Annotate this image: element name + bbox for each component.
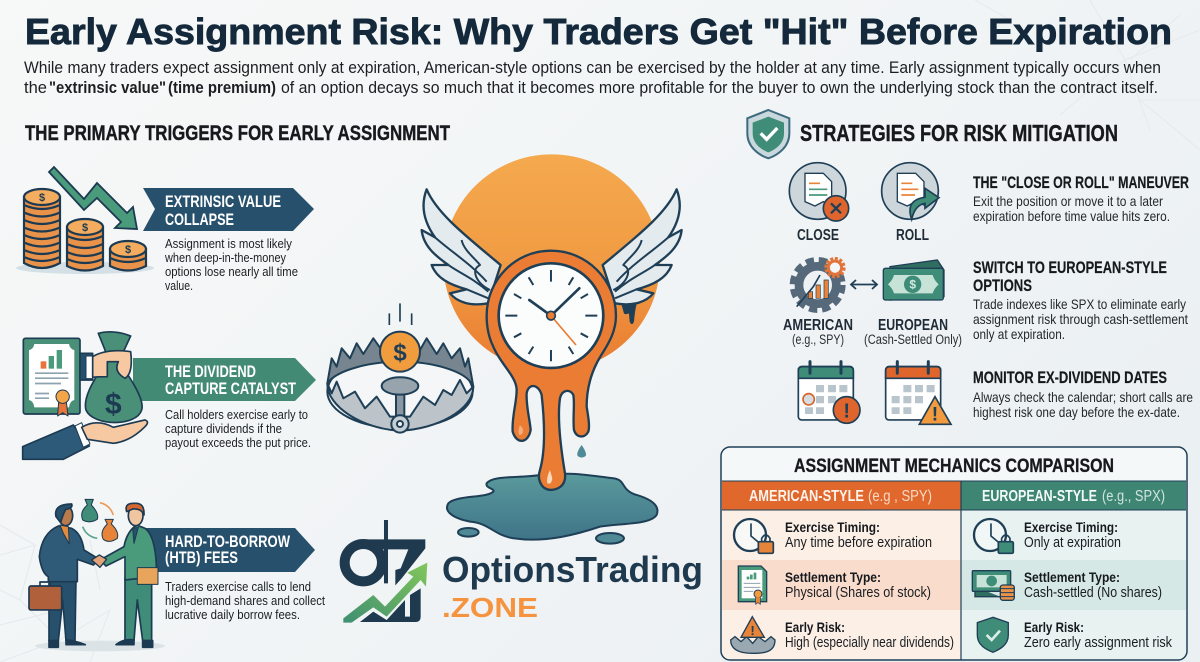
labels: american: AMERICAN: [783, 317, 853, 334]
icon: close: [789, 163, 849, 221]
ribbon: dividend capture: [133, 358, 316, 401]
icon: calendar with warning: !: [932, 405, 938, 426]
text: switch to european: only at expiration.: [973, 326, 1065, 342]
icon: calendar with warning: [886, 362, 951, 426]
header: american-style: (e.g , SPY): [868, 488, 932, 505]
right wing: [603, 189, 682, 304]
text: dividend description: payout exceeds the put price.: [165, 435, 311, 450]
ribbon: hard to borrow: [145, 528, 315, 572]
panel: hard-to-borrow fees: [29, 499, 325, 651]
intro text: While many traders expect assignment only at expiration, American-style options can be exercised by the holder at any time. Early assignment typically occurs when: [24, 59, 1161, 77]
puddle: [447, 445, 657, 544]
logo .zone: .ZONE: [442, 592, 538, 623]
logo: OptionsTrading.Zone: [343, 520, 703, 623]
illustration: bear trap with dollar coin: $: [393, 339, 407, 366]
ribbon: hard to borrow: HARD-TO-BORROW: [165, 533, 290, 551]
text: extrinsic description: when deep-in-the-money: [164, 250, 286, 265]
text: switch to european: [973, 259, 1188, 342]
text: monitor ex-dividend dates: [973, 369, 1193, 420]
illustration: melting winged clock: [422, 154, 682, 544]
icon: european bills: $: [909, 278, 916, 292]
text: close or roll: Exit the position or move it to a later: [973, 193, 1163, 209]
icon: stock certificate: [738, 566, 767, 604]
icon: calendar with alert: [798, 362, 860, 423]
ribbon: hard to borrow: (HTB) FEES: [165, 549, 238, 567]
label: close: CLOSE: [797, 227, 839, 244]
icon: roll: [882, 163, 939, 219]
text: extrinsic description: options lose nearly all time: [165, 264, 298, 279]
logo wordmark: OptionsTrading: [442, 549, 703, 590]
text: close or roll: [973, 174, 1189, 224]
text: american timing: [785, 519, 932, 551]
panel: extrinsic value collapse: [16, 167, 314, 293]
icon: coin stacks with falling arrow: $: [39, 192, 45, 204]
ribbon: extrinsic value collapse: EXTRINSIC VALUE: [165, 193, 281, 211]
icon: european bills: [883, 260, 944, 300]
heading: primary triggers: THE PRIMARY TRIGGERS FOR EARLY ASSIGNMENT: [25, 121, 450, 145]
label: roll: ROLL: [896, 227, 929, 244]
melting clock body: [487, 251, 616, 490]
illustration: bear trap with dollar coin: [327, 303, 473, 433]
text: HTB description: [165, 579, 325, 622]
icon: certificate and money bag handoff: $: [105, 388, 122, 421]
intro text: the: [24, 79, 47, 97]
text: dividend description: Call holders exercise early to: [165, 407, 308, 422]
labels: european: [864, 317, 962, 347]
panel: strategies for risk mitigation: [747, 110, 1193, 426]
text: european risk: [1024, 619, 1173, 651]
left wing: [422, 189, 501, 304]
labels: european: (Cash-Settled Only): [864, 332, 962, 347]
header: american-style: AMERICAN-STYLE: [749, 488, 864, 505]
icon: coin stacks with falling arrow: $: [125, 244, 131, 256]
text: european timing: Only at expiration: [1024, 535, 1121, 551]
icon: coin stacks with falling arrow: [16, 167, 154, 274]
text: european risk: Early Risk:: [1024, 619, 1084, 635]
text: switch to european: OPTIONS: [973, 277, 1032, 295]
text: american risk: High (especially near dividends): [785, 635, 954, 651]
text: extrinsic description: Assignment is most likely: [165, 236, 292, 251]
text: dividend description: [165, 407, 311, 450]
ribbon: dividend capture: THE DIVIDEND: [165, 363, 256, 381]
text: close or roll: expiration before time value hits zero.: [973, 208, 1170, 224]
text: european timing: [1024, 519, 1121, 551]
labels: american: [783, 317, 853, 347]
title: Early Assignment Risk: Why Traders Get "Hit" Before Expiration: [25, 11, 1172, 52]
text: american timing: Exercise Timing:: [785, 519, 880, 535]
icon: two businessmen shaking hands: [29, 499, 165, 651]
icon: green shield: [977, 617, 1008, 652]
icon: cash and coins: [972, 571, 1014, 600]
heading: strategies: STRATEGIES FOR RISK MITIGATION: [800, 120, 1118, 146]
text: dividend description: capture dividends if the: [165, 421, 282, 436]
icon: clock with green lock: [974, 519, 1013, 553]
text: american risk: [785, 619, 954, 651]
labels: european: EUROPEAN: [878, 317, 948, 334]
icon: american gear: [794, 259, 844, 309]
text: american settlement: [785, 569, 931, 601]
wing drip: [622, 304, 637, 324]
logo mark: [343, 520, 427, 623]
text: european settlement: [1024, 569, 1162, 601]
panel: dividend capture catalyst: [23, 332, 316, 459]
intro text: of an option decays so much that it becomes more profitable for the buyer to own the underlying stock than the contract itself.: [281, 79, 1158, 97]
labels: american: (e.g., SPY): [792, 332, 844, 347]
intro text: [24, 59, 1161, 97]
header: european-style: (e.g., SPX): [1102, 488, 1165, 505]
ribbon: extrinsic value collapse: COLLAPSE: [165, 211, 234, 229]
intro text: (time premium): [168, 79, 276, 97]
icon: shield check: [747, 110, 789, 158]
table background and rows: [721, 447, 1187, 660]
icon: warning over trap: [731, 617, 775, 653]
icon: warning over trap: !: [750, 623, 755, 638]
icon: clock with orange lock: [734, 519, 773, 553]
table title: ASSIGNMENT MECHANICS COMPARISON: [794, 456, 1114, 477]
text: european risk: Zero early assignment risk: [1024, 635, 1173, 651]
arrow: american to european: [851, 280, 877, 289]
intro text: "extrinsic value": [49, 79, 166, 97]
clock face: [499, 263, 603, 368]
text: extrinsic description: [164, 236, 298, 293]
text: american timing: Any time before expiration: [785, 535, 932, 551]
icon: certificate and money bag handoff: [23, 332, 147, 459]
icon: coin stacks with falling arrow: $: [82, 222, 88, 234]
text: european settlement: Cash-settled (No shares): [1024, 585, 1162, 601]
ribbon: extrinsic value collapse: [143, 188, 314, 231]
icon: calendar with alert: !: [843, 400, 850, 422]
panel: assignment mechanics comparison table: [721, 447, 1187, 660]
text: european timing: Exercise Timing:: [1024, 519, 1118, 535]
text: american settlement: Settlement Type:: [785, 569, 881, 585]
text: HTB description: lucrative daily borrow fees.: [165, 607, 300, 622]
text: HTB description: high-demand shares and collect: [165, 593, 325, 608]
text: extrinsic description: value.: [165, 278, 193, 293]
text: european settlement: Settlement Type:: [1024, 569, 1120, 585]
text: HTB description: Traders exercise calls to lend: [165, 579, 311, 594]
text: american risk: Early Risk:: [785, 619, 845, 635]
header: european-style: EUROPEAN-STYLE: [982, 488, 1097, 505]
text: american settlement: Physical (Shares of stock): [785, 585, 931, 601]
orange sun: [443, 154, 660, 371]
ribbon: dividend capture: CAPTURE CATALYST: [165, 380, 296, 398]
